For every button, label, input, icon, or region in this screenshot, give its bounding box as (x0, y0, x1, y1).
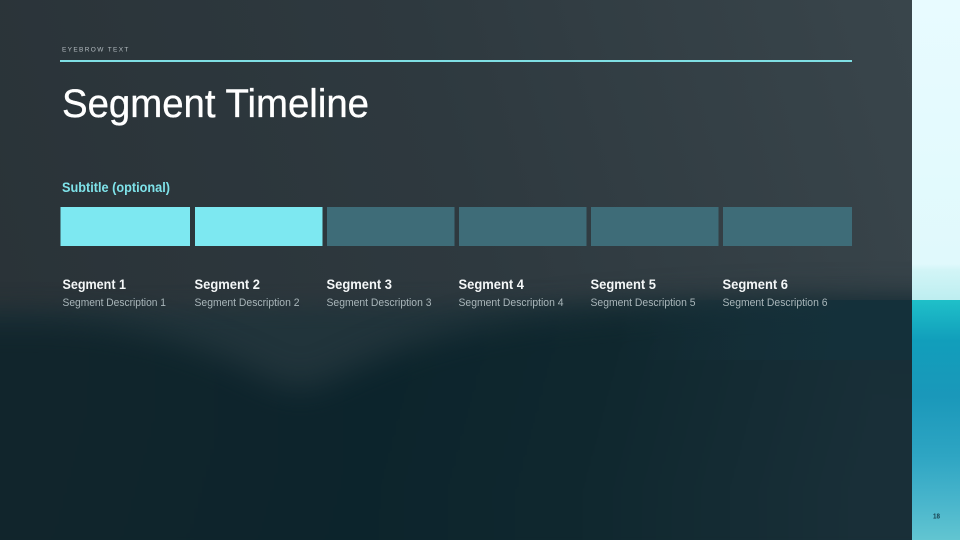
segment 3 label (326, 276, 432, 309)
segment 3 label: Segment Description 3 (326, 297, 432, 309)
segment 1 label (62, 276, 166, 309)
segment bar 1 (60, 207, 190, 246)
segment 1 label: Segment Description 1 (62, 297, 166, 309)
page number: 18 (933, 514, 940, 520)
segment bar 6 (723, 207, 852, 246)
segment 6 label (722, 276, 828, 309)
segment 3 label: Segment 3 (326, 276, 392, 292)
title: Segment Timeline (62, 82, 369, 126)
segment 4 label (458, 276, 564, 309)
sidebar: lower teal panel (912, 300, 960, 540)
segment labels (62, 276, 828, 309)
segment 4 label: Segment 4 (458, 276, 524, 292)
segment bar 4 (459, 207, 586, 246)
segment 5 label (590, 276, 696, 309)
subtitle: Subtitle (optional) (62, 179, 170, 195)
sidebar: upper light panel (912, 0, 960, 300)
segment 6 label: Segment 6 (722, 276, 788, 292)
eyebrow text: EYEBROW TEXT (62, 46, 130, 54)
segment bar timeline (60, 207, 852, 246)
segment 4 label: Segment Description 4 (458, 297, 564, 309)
segment bar 3 (327, 207, 454, 246)
segment bar 2 (195, 207, 322, 246)
segment 6 label: Segment Description 6 (722, 297, 828, 309)
segment bar 5 (591, 207, 718, 246)
segment 1 label: Segment 1 (62, 276, 126, 292)
header rule (60, 60, 852, 62)
segment 5 label: Segment Description 5 (590, 297, 696, 309)
segment 5 label: Segment 5 (590, 276, 656, 292)
segment 2 label: Segment Description 2 (194, 297, 300, 309)
segment 2 label: Segment 2 (194, 276, 260, 292)
segment 2 label (194, 276, 300, 309)
